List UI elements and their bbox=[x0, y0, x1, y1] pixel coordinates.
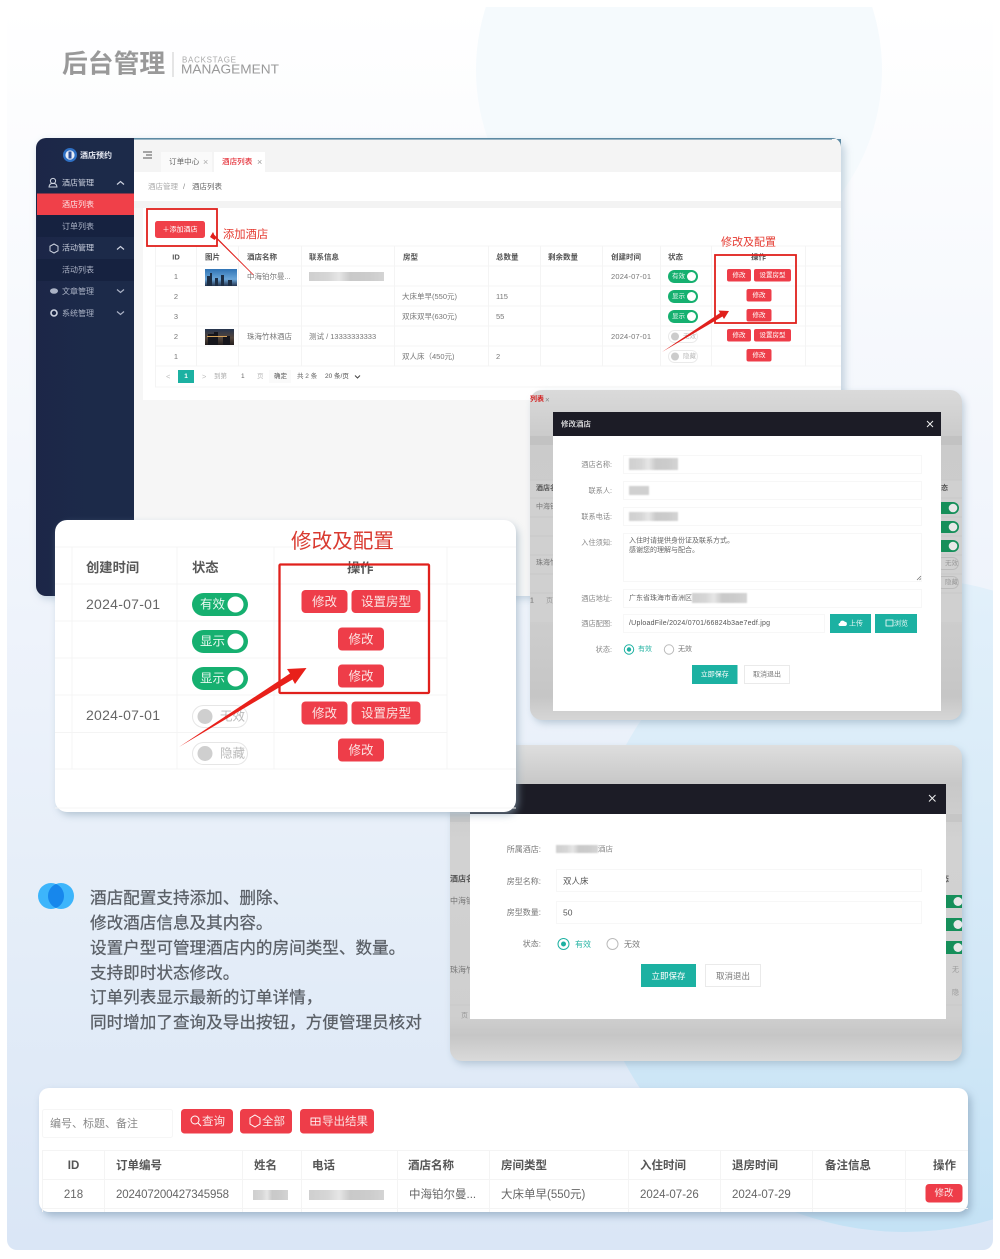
sidebar: 订单列表 bbox=[62, 221, 94, 231]
hotel table: 双人床（450元) bbox=[402, 351, 455, 361]
order table: 入住时间 bbox=[640, 1158, 686, 1172]
modal dialog: room type: 房型名称: bbox=[507, 876, 541, 886]
pagination: 1 bbox=[241, 373, 245, 380]
panel: edit hotel modal: 态 bbox=[941, 483, 948, 492]
modal dialog: edit hotel: 酒店配图: bbox=[581, 619, 612, 628]
pagination bbox=[166, 370, 360, 383]
order table: 退房时间 bbox=[732, 1158, 778, 1172]
title bbox=[62, 48, 279, 78]
panel: enlarged status table: 2024-07-01 bbox=[86, 596, 160, 612]
callout: enlarged edit and configure bbox=[179, 530, 429, 747]
hotel table: 状态 bbox=[668, 252, 683, 262]
action buttons: 修改 bbox=[732, 270, 746, 279]
pagination: 到第 bbox=[214, 371, 228, 380]
modal dialog: edit hotel: 取消退出 bbox=[753, 670, 781, 678]
action buttons: 设置房型 bbox=[760, 330, 786, 339]
modal dialog: room type: 50 bbox=[563, 908, 573, 918]
hotel table: ID bbox=[172, 252, 180, 262]
panel: enlarged status table: 创建时间 bbox=[86, 559, 139, 575]
hotel table: 测试 / 13333333333 bbox=[309, 331, 376, 341]
panel: edit hotel modal: 页 bbox=[546, 596, 553, 604]
hotel table: 2 bbox=[496, 352, 500, 361]
sidebar bbox=[36, 138, 134, 596]
title: 后台管理 bbox=[62, 48, 165, 78]
callout: add hotel: 添加酒店 bbox=[223, 227, 268, 241]
modal dialog: edit hotel: 广东省珠海市香洲区 bbox=[629, 593, 692, 602]
search input bbox=[42, 1110, 172, 1138]
pagination: < bbox=[166, 372, 171, 381]
modal dialog: edit hotel: 状态: bbox=[596, 645, 612, 654]
text block: feature description: 酒店配置支持添加、删除、 bbox=[90, 888, 289, 908]
text block: feature description: 设置户型可管理酒店内的房间类型、数量。 bbox=[90, 938, 405, 958]
breadcrumb: 酒店列表 bbox=[192, 181, 222, 191]
modal dialog: edit hotel: 酒店名称: bbox=[581, 460, 612, 469]
modal dialog: room type: 酒店 bbox=[598, 844, 613, 854]
tabs bar: 订单中心 bbox=[169, 156, 200, 166]
hotel table: 55 bbox=[496, 312, 504, 321]
hotel table: 2024-07-01 bbox=[611, 272, 651, 281]
hotel table: 剩余数量 bbox=[548, 252, 578, 262]
modal dialog: edit hotel: 立即保存 bbox=[701, 670, 729, 678]
status toggles: 显示 bbox=[672, 312, 686, 320]
panel: room type modal: 无 bbox=[952, 966, 959, 974]
status toggles: 显示 bbox=[672, 292, 686, 300]
breadcrumb: / bbox=[183, 182, 186, 191]
panel: edit hotel modal: 珠海竹 bbox=[536, 558, 557, 566]
panel: order list bbox=[39, 1088, 971, 1216]
enlarged action buttons: 修改 bbox=[348, 632, 374, 646]
modal dialog: room type: 双人床 bbox=[563, 876, 589, 886]
status toggles: 无效 bbox=[683, 331, 696, 340]
query button: 查询 bbox=[202, 1114, 225, 1128]
order table: 218 bbox=[64, 1189, 83, 1201]
modal dialog: edit hotel: 入住须知: bbox=[581, 538, 612, 547]
modal dialog: edit hotel: 酒店地址: bbox=[581, 594, 612, 603]
action buttons: 修改 bbox=[732, 330, 746, 339]
panel: edit hotel modal: × bbox=[545, 396, 550, 404]
panel: enlarged status table: 操作 bbox=[347, 560, 374, 576]
sidebar: 文章管理 bbox=[62, 286, 94, 296]
hotel table: 2 bbox=[174, 292, 178, 301]
hotel table: 房型 bbox=[403, 252, 418, 262]
callout: add hotel bbox=[147, 209, 268, 275]
panel: edit hotel modal bbox=[530, 390, 964, 723]
pagination: 共 2 条 bbox=[297, 371, 318, 380]
modal dialog: edit hotel: /UploadFile/2024/0701/66824b3ae7edf.jpg bbox=[629, 620, 770, 627]
order table: 修改 bbox=[934, 1187, 954, 1199]
arrow: to add hotel button bbox=[210, 232, 254, 275]
order table: 房间类型 bbox=[501, 1158, 547, 1172]
sidebar: 活动管理 bbox=[62, 242, 94, 252]
order table: 中海铂尔曼... bbox=[409, 1187, 476, 1201]
arrow: to enlarged action buttons bbox=[179, 668, 306, 747]
hotel table: 图片 bbox=[205, 252, 220, 262]
order table: 202407200427345958 bbox=[116, 1189, 229, 1201]
panel: enlarged status table: 2024-07-01 bbox=[86, 707, 160, 723]
panel: edit hotel modal: 中海铂 bbox=[536, 502, 557, 510]
modal dialog: room type bbox=[470, 784, 946, 1019]
export button bbox=[300, 1109, 374, 1134]
all button bbox=[240, 1109, 292, 1134]
panel: edit hotel modal: 1 bbox=[530, 598, 534, 604]
action buttons: 修改 bbox=[752, 290, 766, 299]
modal dialog: edit hotel: 联系电话: bbox=[581, 512, 612, 521]
order table: 订单编号 bbox=[116, 1158, 162, 1172]
add hotel button: ＋添加酒店 bbox=[162, 224, 198, 234]
pagination: 页 bbox=[257, 372, 264, 380]
enlarged action buttons: 修改 bbox=[348, 742, 374, 758]
enlarged status toggles: 显示 bbox=[200, 634, 225, 648]
action buttons: 修改 bbox=[752, 350, 766, 359]
callout: enlarged edit and configure: 修改及配置 bbox=[291, 530, 394, 553]
panel: room type modal: 中海铂 bbox=[450, 896, 474, 906]
hotel table: 1 bbox=[174, 352, 178, 361]
status toggles bbox=[668, 270, 698, 362]
panel: enlarged status table bbox=[55, 520, 518, 815]
hotel table: 双床双早(630元) bbox=[402, 311, 458, 321]
search input: 编号、标题、备注 bbox=[50, 1116, 138, 1130]
modal dialog: edit hotel bbox=[553, 412, 941, 711]
modal dialog: room type: 房型数量: bbox=[507, 907, 541, 917]
modal dialog: room type: 立即保存 bbox=[651, 971, 686, 981]
modal dialog: edit hotel: 修改酒店 bbox=[561, 418, 591, 428]
callout: edit and configure: 修改及配置 bbox=[721, 234, 776, 248]
panel: room type modal: 隐 bbox=[952, 988, 959, 996]
panel: edit hotel modal: 隐藏 bbox=[945, 577, 958, 586]
modal dialog: edit hotel: 有效 bbox=[638, 644, 652, 653]
hotel table: 酒店名称 bbox=[247, 252, 277, 262]
enlarged action buttons bbox=[302, 590, 420, 762]
modal dialog: room type: 无效 bbox=[624, 939, 640, 949]
tabs bar: × bbox=[203, 157, 208, 167]
modal dialog: room type: 状态: bbox=[523, 938, 541, 948]
order table: 2024-07-29 bbox=[732, 1189, 791, 1201]
tabs bar bbox=[143, 152, 265, 172]
hotel table: 中海铂尔曼... bbox=[247, 271, 291, 281]
order table: 姓名 bbox=[254, 1158, 277, 1172]
text block: feature description: 支持即时状态修改。 bbox=[90, 964, 239, 982]
enlarged status toggles: 无效 bbox=[220, 708, 246, 724]
hotel photo 1 bbox=[205, 269, 237, 286]
order table: 大床单早(550元) bbox=[501, 1187, 586, 1201]
enlarged action buttons: 修改 bbox=[348, 668, 374, 684]
order table: 2024-07-26 bbox=[640, 1189, 699, 1201]
status toggles: 隐藏 bbox=[683, 351, 696, 360]
sidebar: 酒店列表 bbox=[62, 199, 94, 209]
pagination: 20 条/页 bbox=[325, 371, 349, 380]
hotel table: 2 bbox=[174, 332, 178, 341]
action buttons: 修改 bbox=[752, 310, 766, 319]
order table: ID bbox=[68, 1160, 79, 1172]
order table: 操作 bbox=[933, 1158, 956, 1172]
enlarged action buttons: 修改 bbox=[312, 706, 337, 720]
hotel table: 联系信息 bbox=[309, 252, 339, 262]
order table: 备注信息 bbox=[825, 1158, 871, 1172]
enlarged status toggles bbox=[192, 593, 248, 764]
hotel table: 1 bbox=[174, 272, 178, 281]
hotel table bbox=[155, 246, 841, 387]
title: BACKSTAGE bbox=[182, 56, 236, 64]
panel: room type modal: 珠海竹 bbox=[450, 964, 474, 974]
status toggles: 有效 bbox=[672, 271, 686, 280]
panel: edit hotel modal: 无效 bbox=[945, 558, 958, 567]
order table bbox=[42, 1150, 968, 1212]
hotel table: 大床单早(550元) bbox=[402, 291, 458, 301]
enlarged status toggles: 显示 bbox=[200, 672, 225, 686]
modal dialog: room type: 取消退出 bbox=[716, 971, 750, 981]
panel: edit hotel modal: 酒店名 bbox=[536, 483, 557, 492]
icon: overlapping circles bbox=[38, 883, 74, 909]
all button: 全部 bbox=[262, 1114, 285, 1128]
panel: room type modal: 酒店名 bbox=[450, 874, 474, 884]
hotel table: 操作 bbox=[751, 252, 766, 262]
sidebar: 系统管理 bbox=[62, 308, 94, 318]
breadcrumb: 酒店管理 bbox=[148, 181, 178, 191]
sidebar: 活动列表 bbox=[62, 264, 94, 274]
modal dialog: room type: 有效 bbox=[575, 939, 591, 949]
query button bbox=[181, 1109, 233, 1134]
tabs bar: × bbox=[257, 157, 262, 167]
title: MANAGEMENT bbox=[181, 62, 279, 76]
enlarged action buttons: 修改 bbox=[312, 594, 337, 609]
enlarged action buttons: 设置房型 bbox=[361, 594, 411, 609]
text block: feature description: 修改酒店信息及其内容。 bbox=[90, 914, 273, 932]
hotel table: 2024-07-01 bbox=[611, 332, 651, 341]
hotel table: 115 bbox=[496, 292, 508, 301]
hotel table: 3 bbox=[174, 312, 178, 321]
order table: 电话 bbox=[312, 1158, 335, 1172]
modal dialog: edit hotel: 联系人: bbox=[588, 486, 612, 495]
modal dialog: room type: 所属酒店: bbox=[507, 844, 541, 854]
modal dialog: edit hotel: 感谢您的理解与配合。 bbox=[629, 545, 699, 554]
panel: edit hotel modal: 列表 bbox=[530, 394, 544, 403]
panel: hotel list admin screenshot bbox=[36, 138, 845, 599]
arrow: to action buttons bbox=[662, 310, 729, 352]
text block: feature description: 订单列表显示最新的订单详情， bbox=[90, 988, 322, 1007]
action buttons bbox=[727, 269, 791, 362]
action buttons: 设置房型 bbox=[760, 270, 786, 279]
enlarged status toggles: 隐藏 bbox=[220, 746, 246, 760]
add hotel button bbox=[155, 221, 205, 238]
modal dialog: edit hotel: 无效 bbox=[678, 644, 692, 653]
panel: enlarged status table: 状态 bbox=[192, 559, 219, 575]
hotel table: 创建时间 bbox=[611, 252, 641, 262]
sidebar: 酒店管理 bbox=[62, 178, 94, 188]
export button: 导出结果 bbox=[322, 1114, 368, 1128]
pagination: 1 bbox=[184, 373, 188, 380]
tabs bar: 酒店列表 bbox=[222, 156, 253, 166]
modal dialog: edit hotel: 上传 bbox=[849, 618, 863, 628]
panel: room type modal: 态 bbox=[941, 874, 949, 884]
panel: room type modal: 页 bbox=[461, 1012, 468, 1020]
pagination: > bbox=[202, 372, 207, 381]
enlarged status toggles: 有效 bbox=[200, 596, 226, 612]
hotel table: 总数量 bbox=[496, 252, 519, 262]
sidebar: 酒店预约 bbox=[80, 150, 112, 160]
panel: room type modal bbox=[450, 745, 964, 1064]
callout: edit and configure bbox=[662, 234, 796, 352]
modal dialog: edit hotel: 浏览 bbox=[894, 618, 908, 628]
hotel table: 珠海竹林酒店 bbox=[247, 331, 292, 341]
enlarged action buttons: 设置房型 bbox=[361, 706, 411, 720]
hotel photo 2 bbox=[205, 329, 234, 345]
breadcrumb bbox=[148, 181, 222, 191]
text block: feature description: 同时增加了查询及导出按钮，方便管理员核对 bbox=[90, 1013, 422, 1032]
modal dialog: edit hotel: 入住时请提供身份证及联系方式。 bbox=[629, 536, 734, 544]
order table: 酒店名称 bbox=[408, 1158, 454, 1172]
pagination: 确定 bbox=[274, 371, 288, 380]
text block: feature description bbox=[90, 888, 422, 1032]
